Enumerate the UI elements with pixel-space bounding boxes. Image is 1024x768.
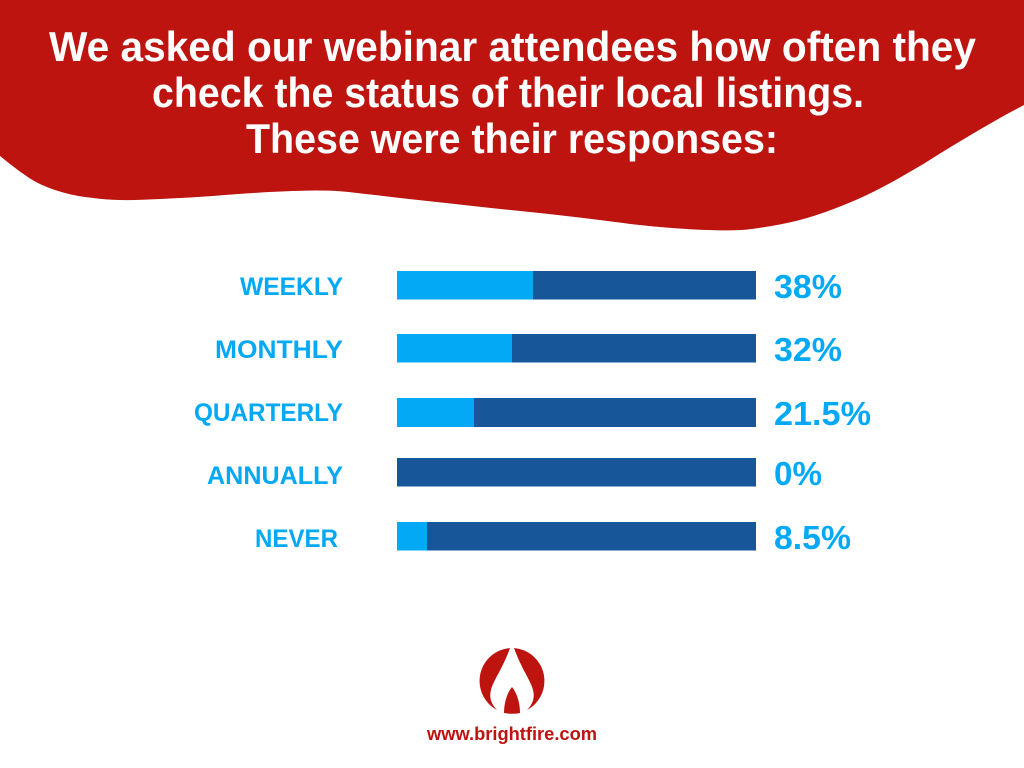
title: We asked our webinar attendees how often they [49, 23, 977, 70]
title [49, 23, 977, 162]
row: monthly: 32% [774, 331, 842, 368]
row: quarterly: 21.5% [774, 395, 871, 432]
row: never [255, 519, 851, 556]
row: monthly [215, 331, 842, 368]
icon: brightfire flame logo [480, 648, 544, 714]
bar chart [194, 268, 871, 556]
row: never: 8.5% [774, 519, 851, 556]
row: never: NEVER [255, 525, 338, 553]
title: check the status of their local listings. [152, 69, 864, 116]
title: These were their responses: [246, 115, 778, 162]
row: annually: 0% [774, 455, 822, 492]
row: weekly: 38% [774, 268, 842, 305]
row: quarterly: QUARTERLY [194, 399, 343, 427]
row: annually [207, 455, 822, 492]
row: weekly [240, 268, 842, 305]
row: weekly: WEEKLY [240, 273, 343, 301]
website url: www.brightfire.com [426, 724, 597, 744]
header wave background [0, 0, 1024, 230]
row: monthly: MONTHLY [215, 336, 343, 364]
row: quarterly [194, 395, 871, 432]
row: annually: ANNUALLY [207, 462, 343, 490]
